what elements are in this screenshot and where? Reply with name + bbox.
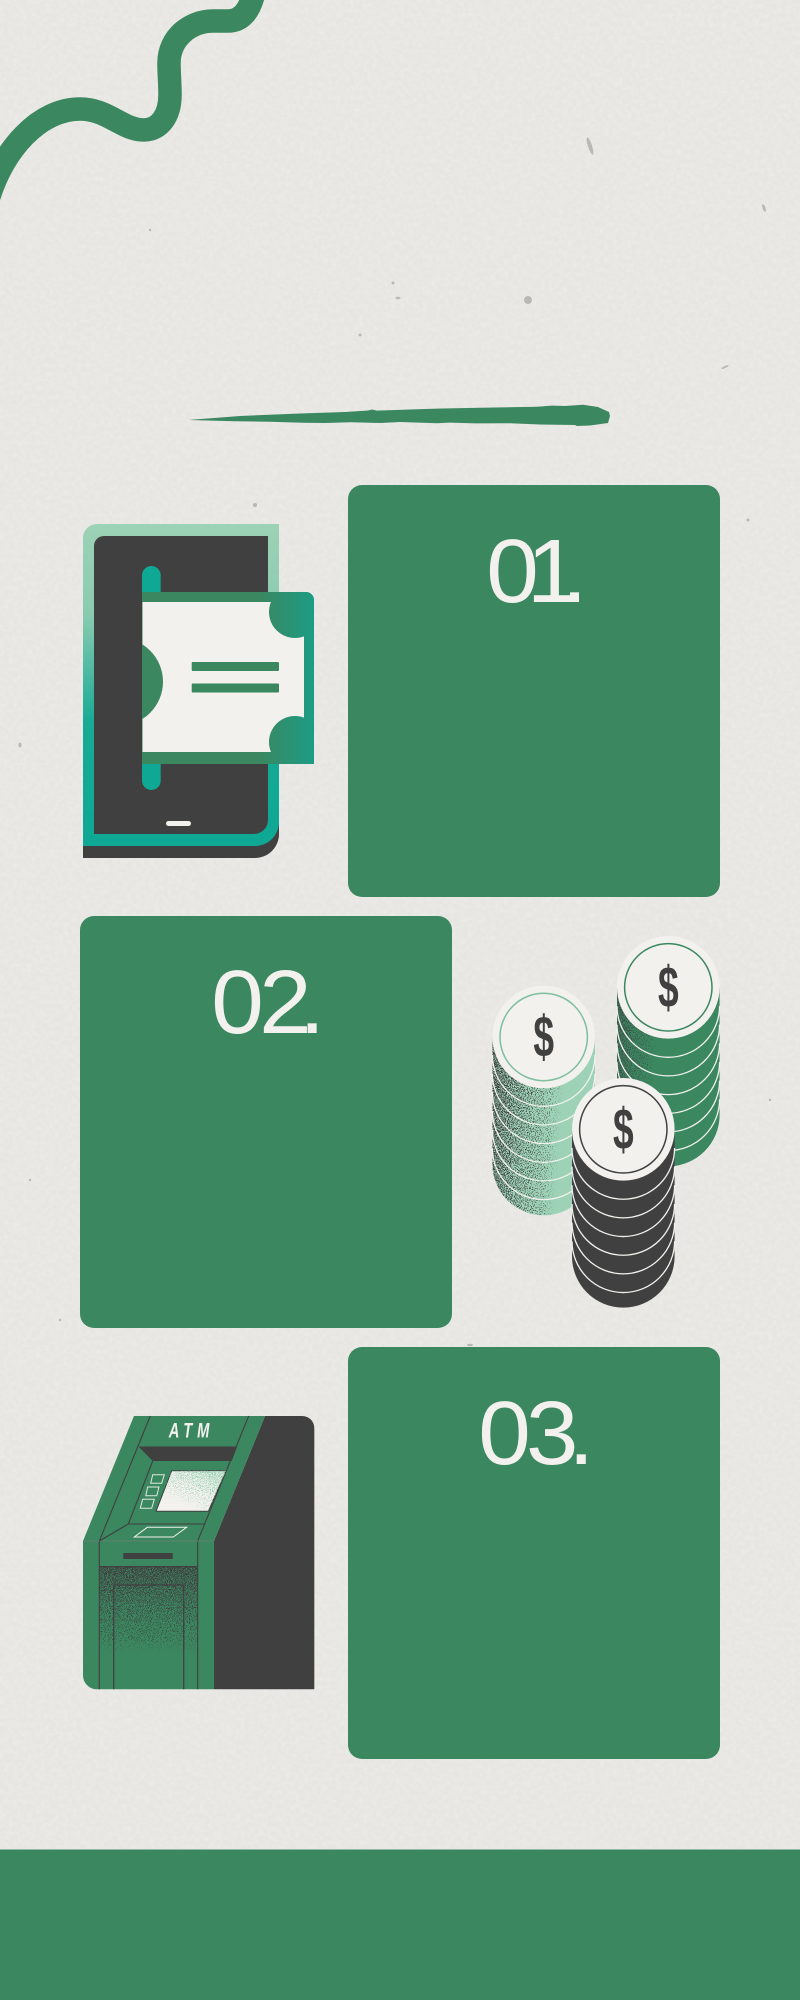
- home button: [166, 821, 191, 826]
- ATM side buttons: [140, 1475, 164, 1508]
- icon: phone with banknote: [75, 524, 321, 858]
- dark recess: [139, 1447, 237, 1461]
- brush stroke: [188, 405, 610, 426]
- squiggle decoration: [0, 0, 254, 206]
- ATM side panel: [214, 1416, 314, 1689]
- ATM screen: [156, 1471, 226, 1511]
- panel 01: [348, 485, 720, 897]
- banknote: [142, 592, 314, 764]
- icon: coin stacks: [492, 936, 720, 1308]
- light coin stack: [492, 986, 595, 1217]
- footer band: [0, 1850, 800, 2000]
- light coin stack: $: [533, 1005, 554, 1070]
- cash slot: [123, 1553, 173, 1559]
- ATM front: [83, 1416, 265, 1689]
- ATM structure lines: [83, 1416, 249, 1689]
- panel 03: [348, 1347, 720, 1759]
- phone screen: [94, 536, 268, 834]
- card tray: [134, 1527, 187, 1537]
- panel 02: [80, 916, 452, 1328]
- number 02: 02.: [211, 951, 325, 1053]
- green coin stack: [617, 936, 720, 1167]
- phone body: [83, 524, 279, 846]
- lower door gradient: [99, 1567, 198, 1689]
- phone shadow: [83, 600, 279, 858]
- number 03: 03.: [478, 1382, 594, 1484]
- icon: ATM machine: [83, 1416, 314, 1689]
- dark coin stack: [572, 1078, 675, 1308]
- ATM label: ATM: [168, 1419, 214, 1442]
- dark coin stack: $: [613, 1098, 634, 1162]
- money slot: [142, 566, 161, 790]
- green coin stack: $: [658, 956, 679, 1020]
- number 01: 01.: [486, 520, 588, 622]
